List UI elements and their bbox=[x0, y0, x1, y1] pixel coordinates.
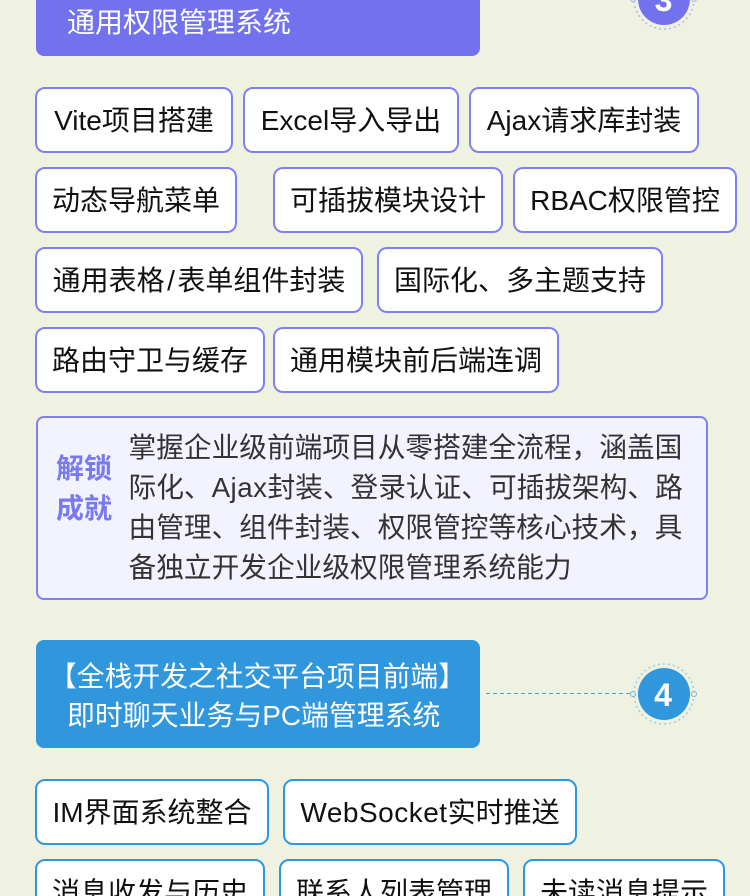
achievement text: 际化、Ajax封装、登录认证、可插拔架构、路 bbox=[128, 472, 683, 503]
tag bbox=[273, 327, 559, 393]
badge: number 4 bbox=[630, 663, 697, 725]
tag: 通用表格/表单组件封装 bbox=[53, 265, 345, 296]
header title line 2: 即时聊天业务与PC端管理系统 bbox=[67, 700, 440, 731]
tag bbox=[279, 859, 509, 896]
achievement text: 由管理、组件封装、权限管控等核心技术，具 bbox=[128, 512, 682, 543]
header: section 3 bbox=[36, 0, 480, 56]
panel: unlocked achievement bbox=[36, 416, 708, 600]
tag: 可插拔模块设计 bbox=[290, 185, 486, 216]
header title line 1: 【全栈开发之社交平台项目前端】 bbox=[49, 661, 466, 692]
tag bbox=[283, 779, 577, 845]
tag: 动态导航菜单 bbox=[52, 185, 220, 216]
tag bbox=[35, 327, 265, 393]
tag bbox=[35, 247, 363, 313]
tag: 路由守卫与缓存 bbox=[52, 345, 248, 376]
tag bbox=[35, 167, 237, 233]
tag bbox=[469, 87, 699, 153]
achievement label: 解锁 bbox=[56, 453, 112, 484]
tag bbox=[35, 779, 269, 845]
tag bbox=[377, 247, 663, 313]
tag: 通用模块前后端连调 bbox=[290, 345, 542, 376]
achievement text: 掌握企业级前端项目从零搭建全流程，涵盖国 bbox=[128, 432, 682, 463]
tag: RBAC权限管控 bbox=[530, 185, 720, 216]
tag: IM界面系统整合 bbox=[52, 797, 252, 828]
connector: dashed line to badge 4 bbox=[486, 693, 630, 694]
tag: Ajax请求库封装 bbox=[487, 105, 681, 136]
achievement label: 成就 bbox=[56, 493, 112, 524]
tag: Excel导入导出 bbox=[261, 105, 441, 136]
tag: 国际化、多主题支持 bbox=[394, 265, 646, 296]
achievement text: 备独立开发企业级权限管理系统能力 bbox=[128, 552, 572, 583]
tag bbox=[273, 167, 503, 233]
tag bbox=[513, 167, 737, 233]
header title: section 3: 通用权限管理系统 bbox=[67, 7, 291, 38]
header: section 4 bbox=[36, 640, 480, 748]
tag bbox=[243, 87, 459, 153]
tag bbox=[523, 859, 725, 896]
badge: number 3 bbox=[630, 0, 697, 30]
badge: number 4: 4 bbox=[654, 676, 672, 712]
tag bbox=[35, 87, 233, 153]
achievement label bbox=[56, 453, 112, 524]
tag bbox=[35, 859, 265, 896]
tag: WebSocket实时推送 bbox=[300, 797, 560, 828]
achievement text bbox=[128, 432, 683, 583]
tag: Vite项目搭建 bbox=[54, 105, 214, 136]
